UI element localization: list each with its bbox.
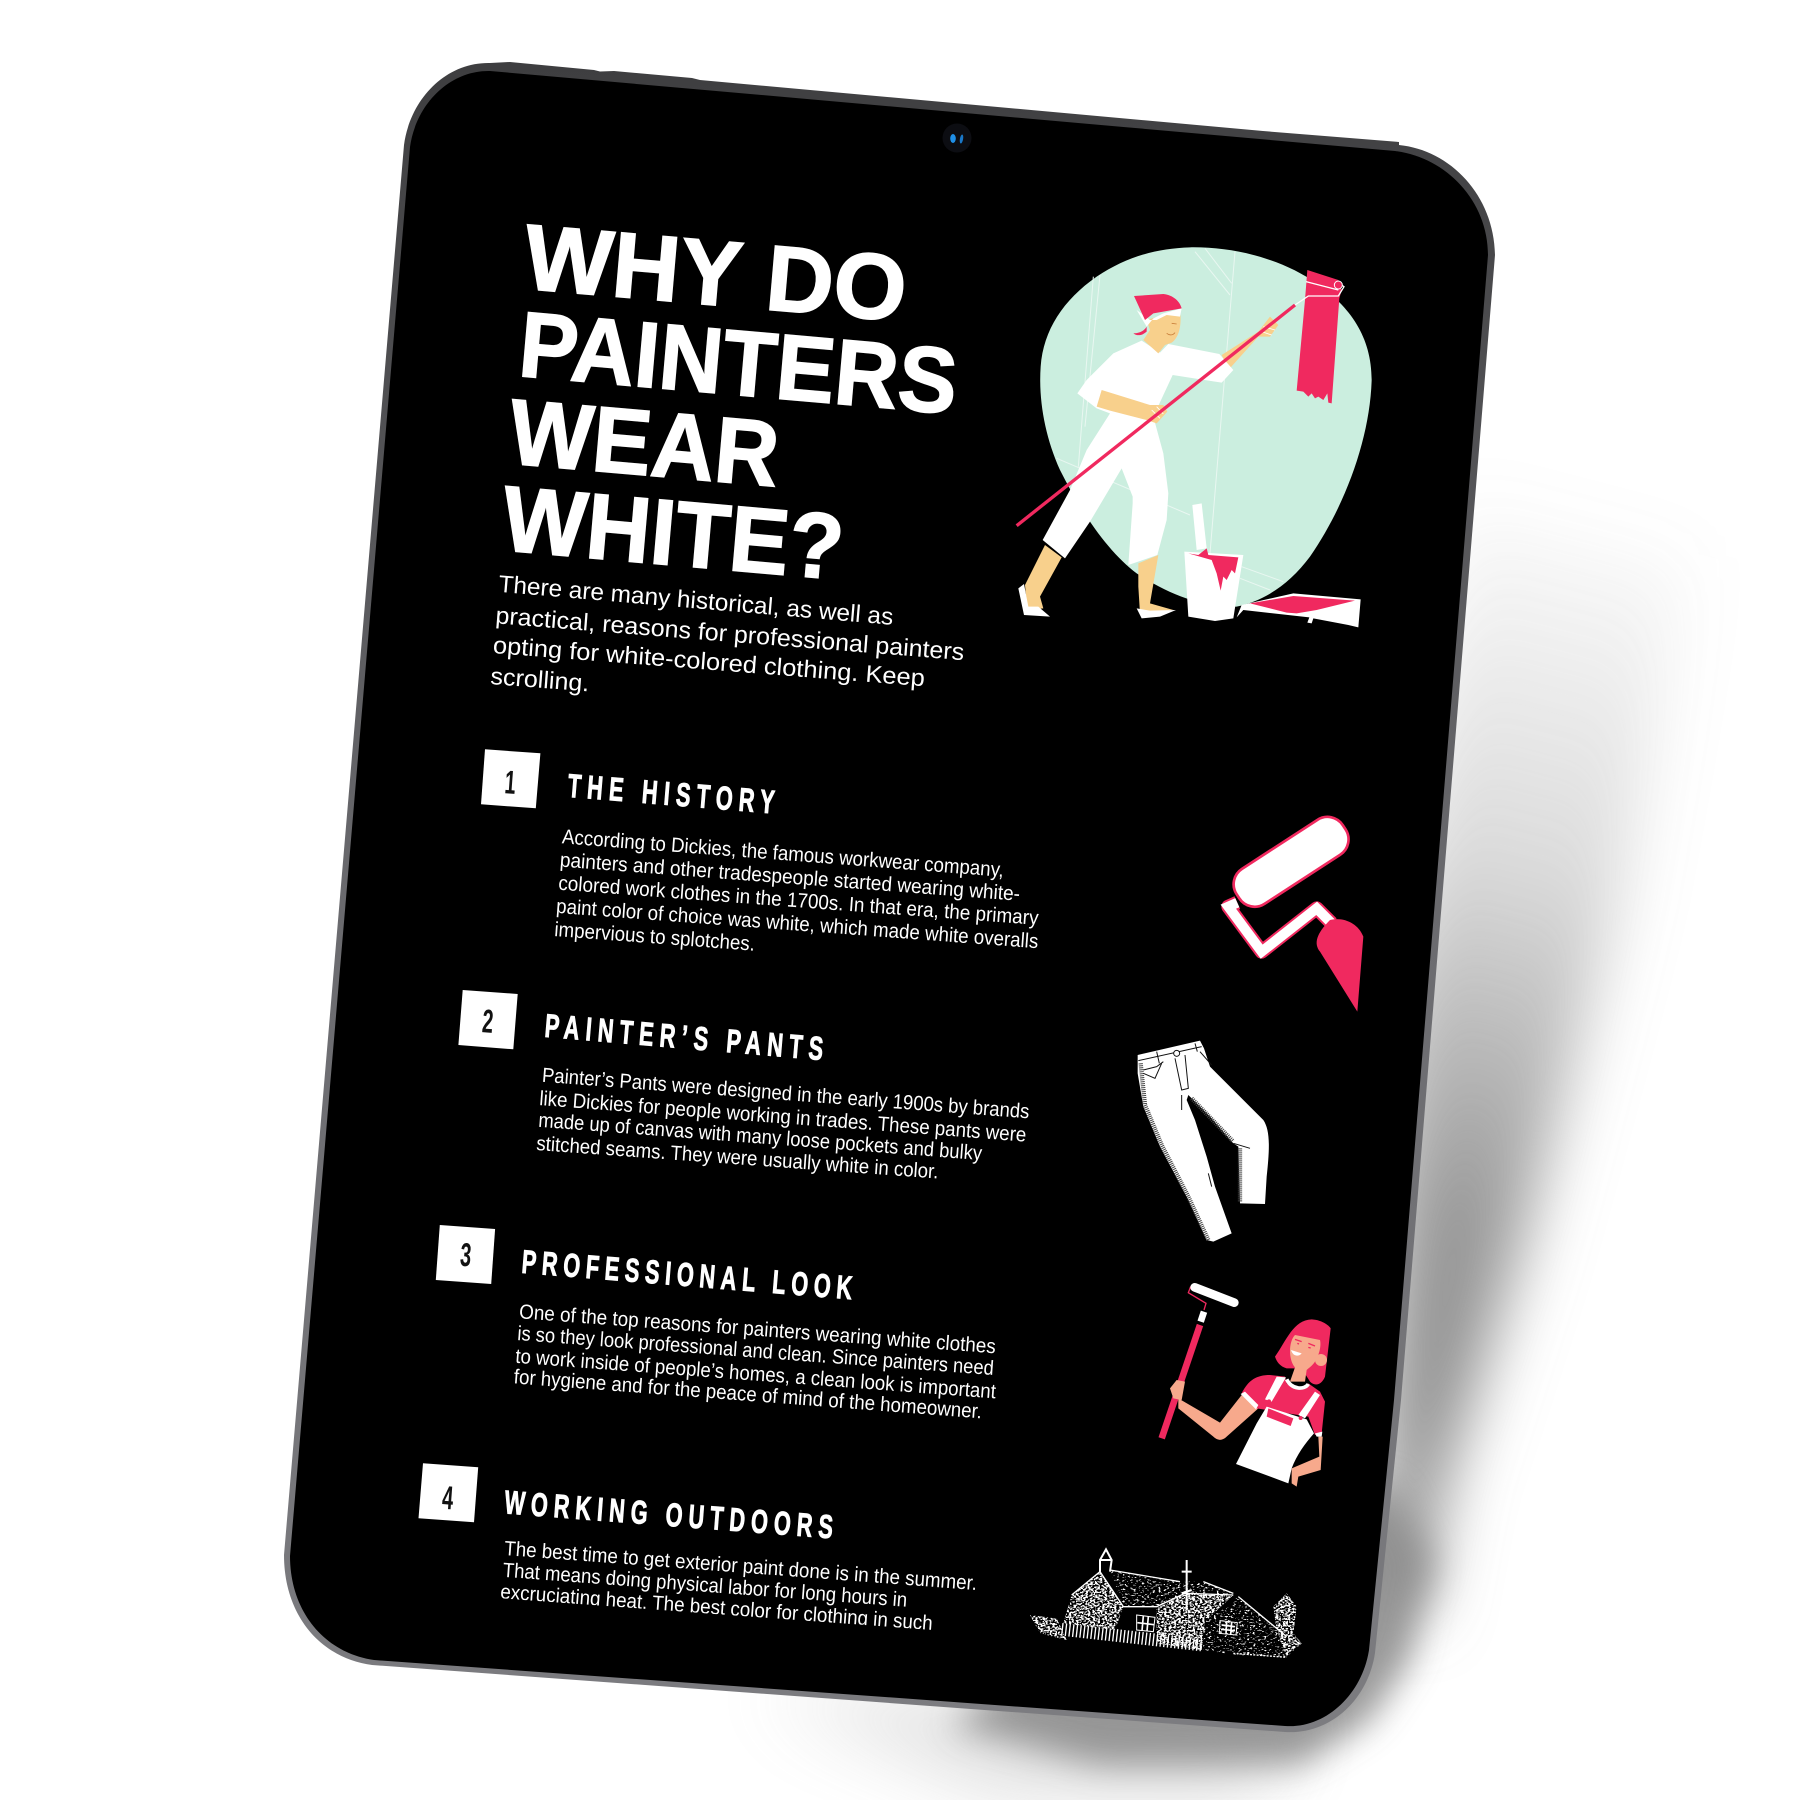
soft drop shadow: [760, 500, 1690, 1795]
body 2: stitched seams. They were usually white in color.: [536, 1132, 939, 1183]
number badge 2: [458, 990, 518, 1049]
body 3: [513, 1300, 997, 1423]
section 2: painter's pants: [458, 990, 1030, 1183]
number badge 1: 1: [503, 763, 517, 801]
intro text: There are many historical, as well as: [497, 571, 894, 631]
section 3: professional look: [436, 1225, 997, 1423]
body 2: Painter’s Pants were designed in the early 1900s by brands: [541, 1064, 1030, 1123]
mint blob: [1040, 247, 1372, 607]
title: WHITE?: [498, 466, 848, 600]
overalls: [1236, 1377, 1320, 1483]
white outfit: [1043, 341, 1233, 565]
arms: [1170, 1380, 1323, 1487]
body 4: The best time to get exterior paint done is in the summer.: [504, 1537, 978, 1595]
forearm and hands: [1097, 390, 1167, 423]
paint stripe: [1297, 270, 1342, 403]
tablet screen: [290, 71, 1488, 1726]
section 4: working outdoors: [418, 1463, 978, 1635]
body 3: is so they look professional and clean. Since painters need: [517, 1322, 995, 1380]
heading 4: WORKING OUTDOORS: [503, 1484, 834, 1545]
shoes: [1018, 584, 1176, 618]
title: [498, 205, 962, 600]
intro text: scrolling.: [490, 663, 590, 697]
paint tray: [1237, 593, 1361, 627]
number badge 1: [481, 749, 540, 808]
title: WHY DO: [520, 205, 911, 341]
head: [1143, 310, 1181, 353]
number badge 2: 2: [481, 1002, 495, 1040]
face: [1290, 1335, 1320, 1382]
bucket: [1184, 503, 1243, 621]
roller pole: [1017, 305, 1295, 526]
illustration: woman painter holding roller: [1162, 1287, 1331, 1487]
number badge 4: [418, 1463, 478, 1522]
heading 3: PROFESSIONAL LOOK: [520, 1243, 854, 1306]
icon: white pants: [1138, 1041, 1269, 1242]
text cut-off mask at screen bottom: [490, 1598, 1000, 1662]
body 3: for hygiene and for the peace of mind of the homeowner.: [513, 1365, 983, 1423]
shirt: [1242, 1375, 1325, 1435]
section 1: the history: [481, 749, 1040, 956]
body 1: painters and other tradespeople started wearing white-: [559, 849, 1021, 906]
body 1: According to Dickies, the famous workwear company,: [561, 825, 1005, 882]
body 2: like Dickies for people working in trades. These pants were: [539, 1087, 1027, 1147]
intro text: [490, 571, 965, 697]
skin: legs and arms: [1025, 317, 1278, 613]
tablet frame: [284, 62, 1495, 1732]
body 4: That means doing physical labor for long hours in: [502, 1559, 908, 1612]
body 2: [536, 1064, 1030, 1183]
icon: paint roller: [1227, 810, 1363, 1012]
intro text: opting for white-colored clothing. Keep: [492, 632, 926, 692]
heading 2: PAINTER’S PANTS: [543, 1007, 825, 1067]
number badge 4: 4: [441, 1478, 455, 1517]
roller: [1188, 1287, 1206, 1310]
illustration: painter rolling paint on a mint blob: [1017, 247, 1372, 627]
title: PAINTERS: [515, 292, 962, 434]
hair: [1275, 1319, 1331, 1384]
body 2: made up of canvas with many loose pockets and bulky: [538, 1109, 984, 1165]
number badge 3: 3: [459, 1235, 473, 1274]
body 1: impervious to splotches.: [554, 918, 756, 956]
body 4: [500, 1537, 978, 1635]
number badge 3: [436, 1225, 495, 1284]
front camera: [942, 124, 972, 152]
body 1: [554, 825, 1040, 956]
intro text: practical, reasons for professional painters: [495, 602, 965, 666]
body 1: colored work clothes in the 1700s. In that era, the primary: [558, 872, 1040, 930]
body 4: excruciating heat. The best color for clothing in such: [500, 1580, 934, 1635]
body 1: paint color of choice was white, which made white overalls: [555, 895, 1039, 953]
illustration: sketch of a house: [1030, 1549, 1302, 1657]
body 3: to work inside of people’s homes, a clean look is important: [515, 1345, 997, 1403]
heading 1: THE HISTORY: [566, 767, 776, 821]
body 3: One of the top reasons for painters wearing white clothes: [518, 1300, 997, 1358]
title: WEAR: [505, 380, 783, 506]
